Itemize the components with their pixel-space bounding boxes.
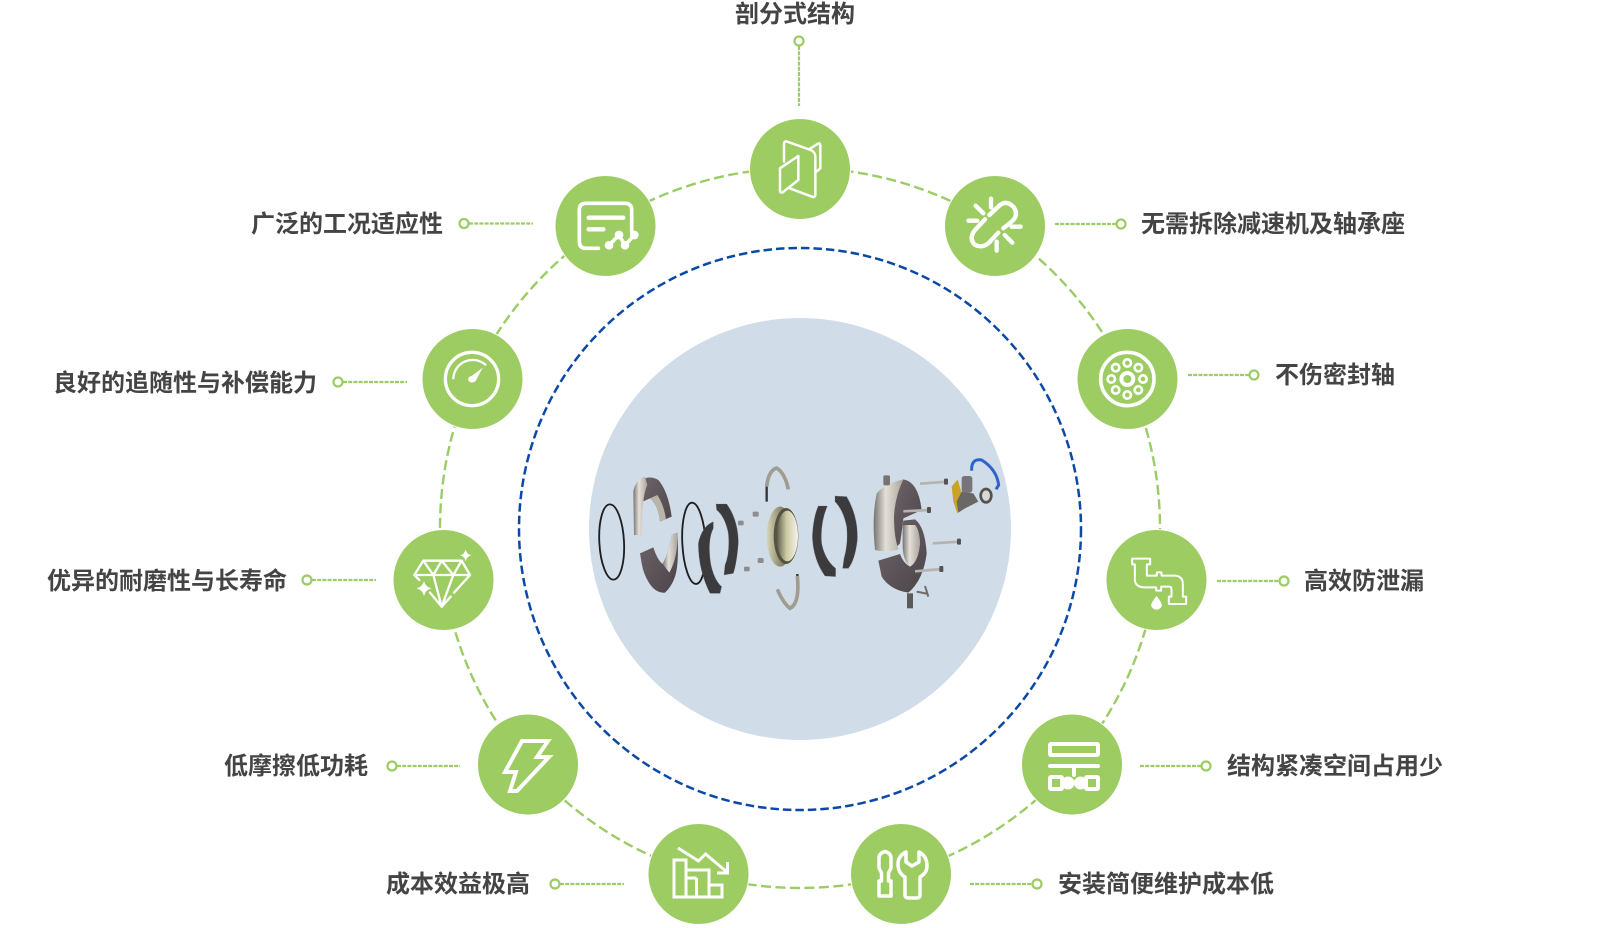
feature: no need to remove reducer [944, 176, 1405, 276]
label: 高效防泄漏: 高效防泄漏 [1304, 568, 1424, 595]
leader line [970, 880, 1042, 888]
left gaskets [698, 504, 738, 593]
blue dashed inner ring [519, 248, 1081, 810]
label: 安装简便维护成本低: 安装简便维护成本低 [1058, 871, 1274, 898]
node circle [850, 824, 952, 924]
leader line [1217, 576, 1288, 586]
exploded seal assembly illustration [597, 460, 999, 608]
feature: does not damage seal shaft [1077, 328, 1395, 430]
icon: bearing [1101, 352, 1154, 406]
housing halves with bolts [874, 475, 961, 608]
leader line [334, 378, 407, 386]
icon: lightning bolt [505, 741, 549, 791]
label: 不伤密封轴: 不伤密封轴 [1275, 361, 1395, 389]
label: 结构紧凑空间占用少: 结构紧凑空间占用少 [1227, 753, 1443, 780]
o-rings [597, 502, 708, 585]
label: 良好的追随性与补偿能力: 良好的追随性与补偿能力 [53, 370, 317, 397]
leader line [1188, 370, 1258, 380]
feature: wide working condition adaptability [251, 176, 656, 276]
feature: low friction and low power [224, 714, 578, 815]
node circle [478, 714, 578, 815]
icon: falling cost chart [672, 848, 728, 897]
icon: tools [879, 852, 927, 898]
node circle [648, 824, 749, 924]
node circle [393, 530, 494, 630]
leader line [794, 36, 804, 106]
icon: gauge [445, 352, 499, 406]
icon: diamond [414, 549, 471, 607]
label: 低摩擦低功耗: 低摩擦低功耗 [224, 753, 368, 780]
node circle [944, 176, 1046, 276]
icon: data card [579, 203, 639, 250]
leader line [460, 219, 533, 228]
feature: compact structure [1022, 714, 1443, 815]
node circle [422, 328, 523, 430]
label: 成本效益极高: 成本效益极高 [386, 871, 530, 898]
feature: good following and compensation [53, 328, 523, 430]
leader line [1055, 220, 1126, 228]
icon: leaking pipe [1132, 559, 1186, 610]
node circle [1022, 714, 1122, 815]
leader line [550, 880, 624, 888]
feature: cost effective [386, 824, 749, 924]
regulator with blue hose [952, 460, 999, 513]
center clamps and bearing ring [738, 468, 798, 608]
icon: layout blocks [1050, 744, 1098, 790]
leader line [302, 576, 376, 584]
label: 优异的耐磨性与长寿命: 优异的耐磨性与长寿命 [47, 567, 287, 595]
flange halves [633, 477, 678, 593]
label: 广泛的工况适应性: 广泛的工况适应性 [251, 211, 443, 238]
feature: easy installation and maintenance [850, 824, 1274, 924]
icon: broken link [968, 199, 1021, 251]
green dashed outer ring [440, 168, 1160, 888]
feature: split structure [735, 1, 855, 220]
node circle [555, 176, 656, 276]
icon: split panels [780, 141, 820, 197]
node circle [750, 118, 850, 220]
node circle [1106, 530, 1207, 630]
central pale blue disc [589, 318, 1011, 740]
node circle [1077, 328, 1178, 430]
feature: wear resistance and long life [47, 530, 494, 630]
right gaskets [812, 496, 857, 577]
feature: efficient leak prevention [1106, 530, 1424, 630]
label: 无需拆除减速机及轴承座: 无需拆除减速机及轴承座 [1141, 210, 1405, 238]
leader line [1140, 762, 1210, 770]
label: 剖分式结构: 剖分式结构 [735, 1, 855, 28]
leader line [388, 762, 460, 770]
